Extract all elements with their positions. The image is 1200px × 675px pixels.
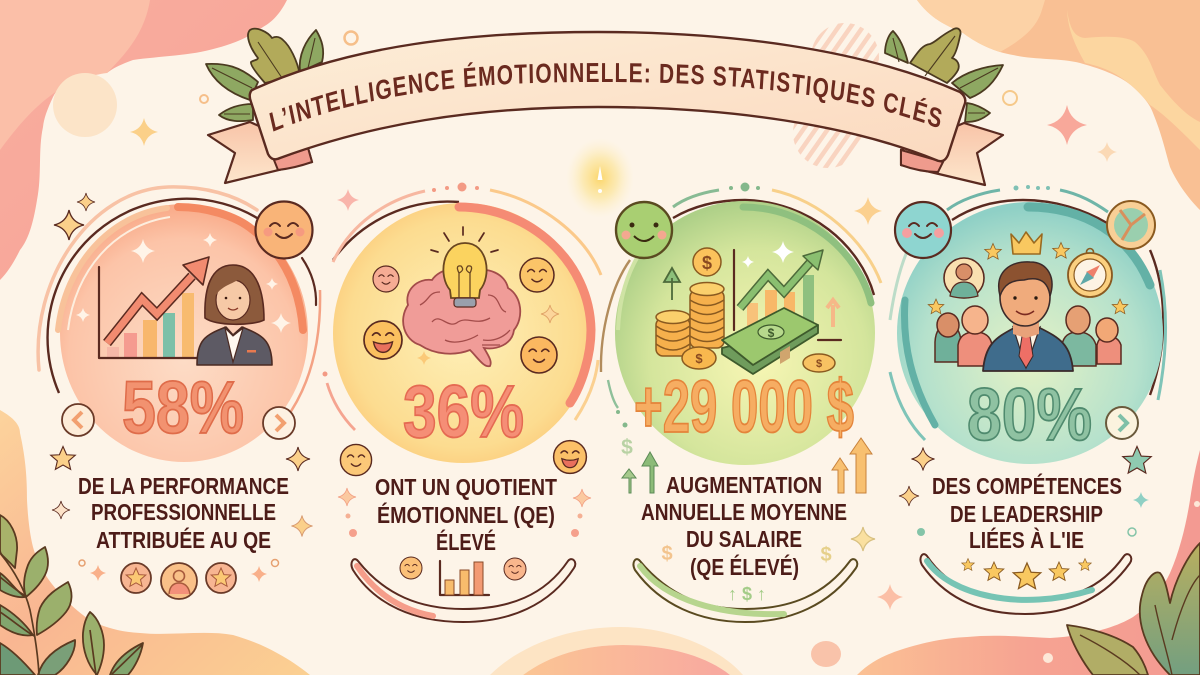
dots 2 [322, 182, 479, 376]
label 4: DES COMPÉTENCES [932, 472, 1122, 499]
chart icon 3 [734, 241, 841, 341]
small decorations 3 [661, 527, 875, 566]
button: next 4 [1106, 407, 1138, 439]
panel: +29 000 $ salary [601, 182, 881, 622]
label 3: ANNUELLE MOYENNE [641, 499, 847, 525]
leaves: ribbon right [885, 28, 1003, 122]
title text: L’INTELLIGENCE ÉMOTIONNELLE: DES STATISTIQUES CLÉS [269, 62, 942, 132]
smile bowl 3 [634, 559, 857, 622]
compass icon [1068, 248, 1112, 297]
sparkles 4 [899, 446, 1151, 536]
glow: central light [566, 138, 634, 218]
stat +29 000 $: +29 000 $ [634, 365, 854, 448]
label 1: ATTRIBUÉE AU QE [96, 526, 271, 553]
growth arrows left [621, 436, 658, 493]
dots 3 [616, 182, 760, 428]
brain icon [403, 268, 520, 366]
faces beside label 2 [340, 441, 586, 476]
label 1: PROFESSIONNELLE [91, 499, 276, 525]
label 3 [641, 472, 847, 580]
ribbon fold left [274, 148, 312, 170]
coin top [693, 248, 721, 276]
plant: bottom right [1067, 543, 1200, 675]
label 3: DU SALAIRE [686, 526, 802, 552]
dots 4 [1014, 185, 1050, 190]
growth arrows right [832, 438, 872, 493]
smile bowl 3: ↑ $ ↑ [728, 584, 766, 604]
stat 80%: 80% [967, 373, 1092, 456]
smile bowl 2 [352, 557, 575, 622]
coin bottom [682, 347, 716, 369]
circle 2 [333, 203, 593, 463]
smile bowl 4 [921, 554, 1131, 614]
circle 1 [60, 204, 308, 462]
woman icon [197, 265, 272, 365]
coin small: $ [816, 358, 822, 370]
coin bottom: $ [695, 351, 703, 366]
circle 3 [615, 201, 875, 465]
label 2: ONT UN QUOTIENT [375, 474, 557, 500]
panel: 58% performance [38, 187, 320, 599]
smiley 4 [895, 202, 951, 258]
coin small [803, 354, 835, 372]
coin top: $ [702, 253, 712, 273]
stat 58%: 58% [122, 366, 244, 449]
sparkles 2 [337, 189, 591, 537]
ribbon body [250, 32, 965, 161]
panel: 36% QE [322, 182, 601, 622]
ribbon fold right [901, 150, 943, 172]
label 4: DE LEADERSHIP [950, 501, 1103, 527]
banknotes: $ [768, 326, 775, 340]
crown icon [1011, 232, 1042, 254]
label 2 [375, 474, 557, 555]
chart icon [99, 257, 209, 358]
sparkles around 1 [51, 193, 312, 536]
smiley 3 [616, 202, 672, 258]
label 2: ÉLEVÉ [436, 528, 496, 555]
leaves: ribbon left [206, 29, 323, 121]
emotion faces [364, 258, 559, 373]
button: next [263, 407, 295, 439]
title ribbon [205, 27, 1004, 186]
banknotes [722, 308, 818, 374]
label 2: ÉMOTIONNEL (QE) [377, 501, 555, 528]
label 4: LIÉES À L'IE [969, 526, 1084, 553]
circle 4 [897, 202, 1163, 464]
up arrow 3 [664, 268, 680, 300]
small decorations 3: $ [820, 544, 832, 566]
label 1 [78, 473, 289, 553]
bulb icon [431, 227, 498, 307]
man icon [983, 262, 1073, 371]
label 3: AUGMENTATION [666, 472, 822, 498]
coin stacks [656, 282, 724, 356]
rings 2 [327, 190, 601, 430]
plant: bottom left [0, 515, 143, 675]
small decorations 3: $ [661, 543, 673, 565]
stars 4 [928, 242, 1128, 314]
sparkles 1 [76, 233, 291, 333]
rings 4 [890, 190, 1166, 440]
pie badge [1107, 201, 1155, 249]
growth arrows left: $ [621, 436, 633, 459]
rings 3 [601, 190, 881, 408]
panel: 80% leadership [890, 185, 1166, 614]
rings 1 [38, 187, 320, 420]
label 1: DE LA PERFORMANCE [78, 473, 289, 499]
rating icons 1 [79, 560, 278, 599]
label 3: (QE ÉLEVÉ) [690, 553, 799, 580]
ribbon tail left [208, 122, 312, 183]
label 4 [932, 472, 1122, 553]
team members [935, 306, 1121, 366]
smiley 1 [256, 202, 312, 258]
button: previous [62, 404, 94, 436]
ribbon tail right [901, 123, 1003, 185]
person in circle [944, 258, 984, 298]
stat 36%: 36% [403, 370, 524, 453]
